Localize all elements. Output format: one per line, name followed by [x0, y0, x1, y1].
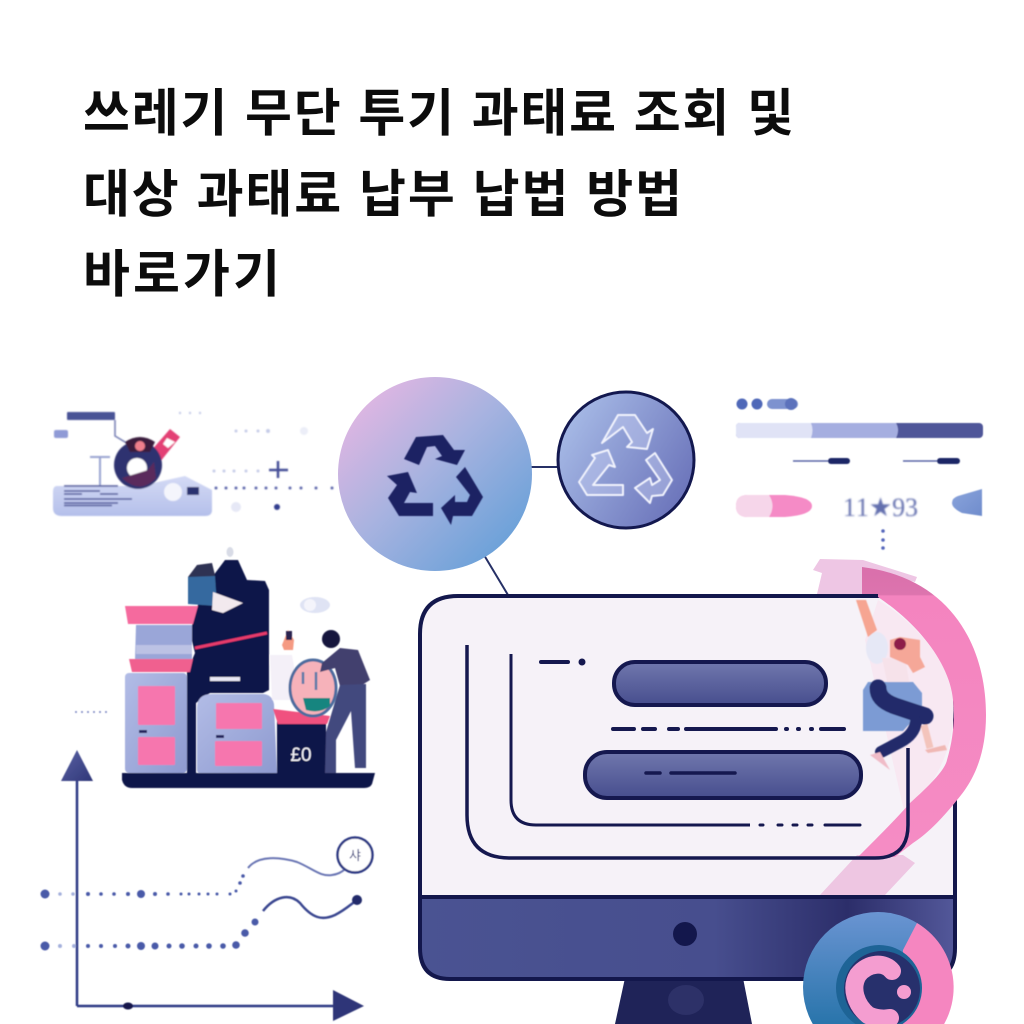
- row 2 end dot: [352, 895, 362, 905]
- inner frame tail dots: [760, 824, 860, 826]
- pink dot: [897, 985, 911, 999]
- monitor top edge over ribbon: [817, 594, 878, 598]
- label marks: 1 1 ★ 9 3: [843, 493, 918, 522]
- monitor: [420, 596, 955, 1024]
- pale sack behind person: [270, 655, 300, 700]
- pink ribbon arc: [858, 567, 986, 857]
- middle cabinet: [197, 694, 277, 773]
- x arrow: [333, 990, 364, 1021]
- leg lower: [924, 725, 930, 748]
- slider left: [793, 458, 850, 464]
- medallion detail: [125, 437, 155, 452]
- input pill upper: [614, 662, 826, 705]
- pale pink back ribbon: [813, 559, 917, 594]
- status dots: [736, 398, 798, 410]
- top dashes: [541, 660, 568, 664]
- blue bin: [188, 576, 217, 606]
- dark bin: £0: [290, 745, 312, 766]
- header tag: [67, 412, 115, 420]
- small recycle circle: [558, 392, 694, 528]
- left cabinet: [125, 606, 198, 773]
- y axis: [76, 780, 78, 1006]
- dark bag: [188, 563, 215, 580]
- red card: [150, 429, 180, 462]
- person: [320, 630, 370, 773]
- label marks: [210, 677, 240, 681]
- monitor outline: [420, 596, 955, 979]
- lower bezel: [420, 897, 955, 979]
- vertical dots: [881, 529, 885, 550]
- navy chip: [187, 487, 199, 495]
- bulb: [226, 547, 234, 557]
- text lines on slab: [64, 486, 132, 506]
- pie emblem: [803, 912, 954, 1024]
- row 2 curve: [263, 897, 357, 918]
- icon: dark recycle arrows: [387, 435, 483, 525]
- center disc: [836, 945, 922, 1024]
- badge icon: [300, 597, 330, 613]
- device slab: [53, 476, 212, 516]
- axis marker: [123, 1002, 133, 1010]
- y arrow: [61, 750, 93, 781]
- row 1 curve: [248, 858, 345, 875]
- panel: screen content: [467, 645, 908, 858]
- title: [83, 85, 794, 303]
- pill inner dashes: [646, 771, 735, 775]
- progress bar: [736, 423, 983, 438]
- base platform: [122, 773, 375, 788]
- end badge: 샤: [349, 848, 361, 863]
- outer frame line: [467, 645, 908, 858]
- panel: top-right UI widgets: [736, 398, 983, 550]
- torso: [882, 658, 910, 686]
- dotted rows: [214, 486, 334, 490]
- shirt: [866, 632, 888, 664]
- white bag: [212, 592, 243, 613]
- pale ribbon tail: [820, 855, 915, 895]
- panel: recycling bins illustration: [75, 547, 375, 788]
- small tag: [75, 711, 107, 713]
- screen body: [420, 596, 954, 897]
- input pill lower: [585, 752, 861, 798]
- pink swirl: [854, 965, 892, 1019]
- row 2 dots: [40, 918, 258, 950]
- pink wedge: [900, 923, 954, 1024]
- slider right: [903, 458, 960, 464]
- dark waste pile: [187, 560, 269, 775]
- top dot: [578, 658, 586, 666]
- white badge: [164, 483, 182, 501]
- middle dashed line: [613, 727, 844, 731]
- face: [894, 638, 906, 650]
- panel: top-left dashboard illustration: [53, 412, 334, 516]
- row 1 dots: [40, 874, 245, 898]
- connector: circles to monitor: [484, 467, 558, 595]
- red stripe: [195, 633, 267, 648]
- navy core: [844, 951, 920, 1024]
- end badge: [338, 838, 372, 872]
- hair: [890, 637, 925, 673]
- panel: line chart: [40, 750, 372, 1021]
- node dot: [274, 504, 280, 510]
- blue seat: [863, 682, 922, 731]
- dark bin: [273, 709, 330, 775]
- faint marks: [179, 412, 308, 512]
- connector line: [115, 420, 130, 445]
- blue marker: [952, 489, 982, 516]
- person sitting on screen: [856, 600, 947, 770]
- power button: [673, 922, 697, 946]
- dark medallion: [114, 441, 162, 489]
- pink pill: [736, 495, 812, 517]
- small chip: [54, 430, 68, 438]
- x axis: [77, 1005, 335, 1007]
- screen stippled area: [865, 600, 953, 815]
- large recycle circle: [338, 377, 532, 571]
- legs: [878, 688, 925, 716]
- icon: outlined recycle arrows: [579, 415, 672, 503]
- plus mark: [269, 461, 288, 478]
- stand highlight: [668, 985, 704, 1015]
- inner frame line: [511, 654, 750, 825]
- monitor stand: [615, 978, 752, 1024]
- title: 쓰레기 무단 투기 과태료 조회 및: [83, 85, 794, 142]
- arm: [856, 600, 877, 637]
- title: 대상 과태료 납부 납법 방법: [83, 166, 682, 223]
- stand: [90, 457, 110, 486]
- net bag: [290, 660, 336, 716]
- shoes: [870, 752, 890, 770]
- hand with phone: [282, 630, 294, 650]
- bezel separator: [420, 895, 955, 899]
- title: 바로가기: [83, 246, 280, 303]
